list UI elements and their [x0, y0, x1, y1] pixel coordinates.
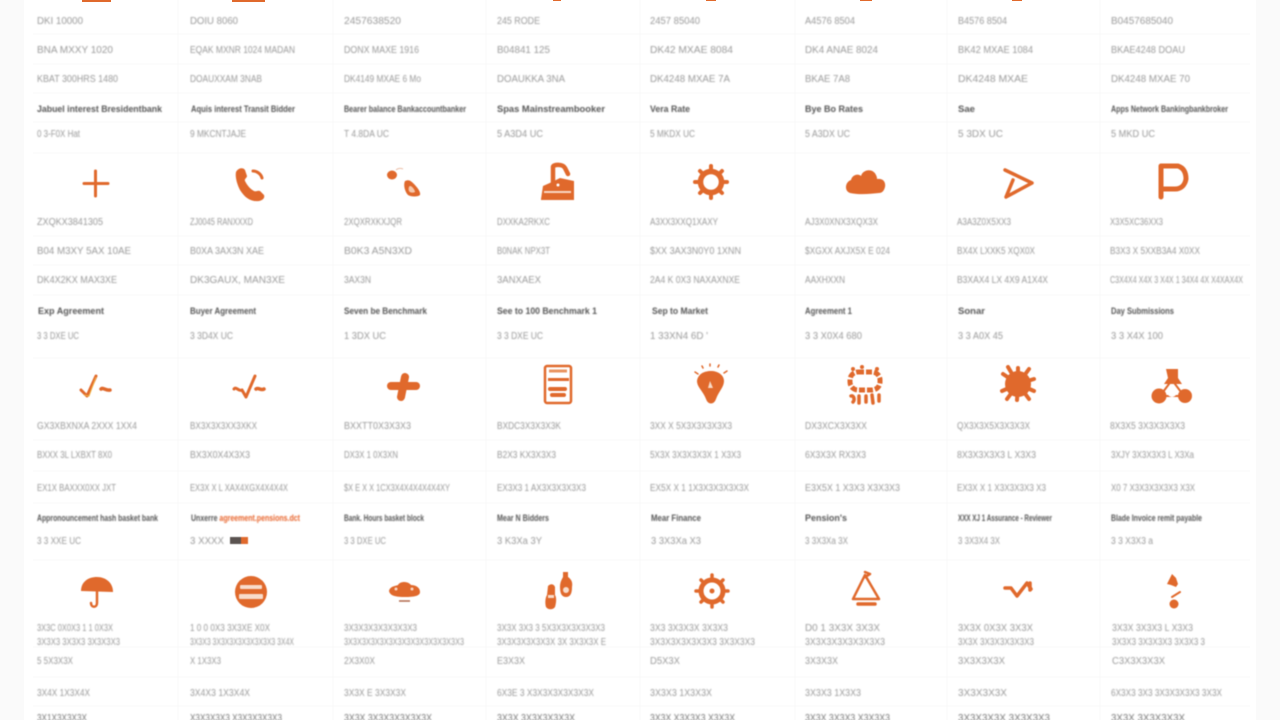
icon: round badge with bars — [235, 576, 267, 608]
labels: 3X3X3X3X3X3X3 3X3X3X3 — [650, 637, 755, 648]
labels: DX3XCX3X3XX — [805, 421, 867, 432]
cell: row 0 column 6: 5 A3DX UC — [805, 129, 850, 140]
cell: row 3 column 4 — [497, 572, 606, 720]
labels: 3X3X3 1X3X3X — [650, 688, 712, 699]
cell: row 0 column 5: DK4248 MXAE 7A — [650, 74, 730, 85]
icon: zigzag line — [1005, 583, 1031, 596]
cell: row 2 column 2 — [190, 376, 301, 547]
labels: $XGXX AXJX5X E 024 — [805, 246, 890, 257]
row 0: partly cropped icons — [82, 0, 1022, 2]
labels — [957, 217, 1048, 342]
labels: 3X4X3 1X3X4X — [190, 688, 250, 699]
labels — [497, 623, 606, 720]
cell: row 0 column 7: Sae — [958, 104, 975, 115]
cell: row 0 column 1: DKI 10000 — [37, 16, 83, 27]
labels: GX3XBXNXA 2XXX 1XX4 — [37, 421, 137, 432]
icon: plus — [84, 171, 108, 196]
labels: 3 3X3Xa X3 — [651, 536, 701, 547]
cell: row 0 column 3: DK4149 MXAE 6 Mo — [344, 74, 421, 85]
cell: row 3 column 7 — [958, 583, 1050, 720]
cell: row 0 column 2: DOAUXXAM 3NAB — [190, 74, 262, 85]
labels: B0NAK NPX3T — [497, 246, 550, 257]
labels: ZJ0045 RANXXXD — [190, 217, 253, 228]
labels: A3XX3XXQ1XAXY — [650, 217, 718, 228]
labels: C3X3X3X3X — [1112, 656, 1165, 667]
cell: row 0 column 6: A4576 8504 — [805, 16, 855, 27]
cell: row 0 column 7: BK42 MXAE 1084 — [958, 45, 1033, 56]
cell: row 3 column 2 — [190, 576, 294, 720]
labels: 5X3X 3X3X3X3X 1 X3X3 — [650, 450, 741, 461]
labels: See to 100 Benchmark 1 — [497, 306, 598, 317]
labels: 1 3DX UC — [344, 331, 386, 342]
labels: Day Submissions — [1111, 306, 1174, 317]
labels: 3ANXAEX — [497, 275, 541, 286]
cell: row 0 column 1 — [37, 16, 163, 140]
labels: 3X3X3X3X3X3X 3X 3X3X3X E — [497, 637, 606, 648]
cell: row 0 column 6: BKAE 7A8 — [805, 74, 850, 85]
labels: 2A4 K 0X3 NAXAXNXE — [650, 275, 740, 286]
labels: AAXHXXN — [805, 275, 845, 286]
labels: Bank. Hours basket block — [344, 513, 424, 524]
cell: row 0 column 8: B0457685040 — [1111, 16, 1173, 27]
labels: Appronouncement hash basket bank — [37, 513, 159, 524]
icon: abacus frame — [545, 366, 571, 403]
labels: Buyer Agreement — [190, 306, 257, 317]
labels: Unxerre agreement.pensions.dct — [191, 513, 301, 524]
labels: DK3GAUX, MAN3XE — [190, 275, 285, 286]
icon: scattered marks — [1167, 574, 1180, 608]
labels: 3X3X 3X3X3X3X3X3 — [958, 637, 1034, 648]
labels: B0XA 3AX3N XAE — [190, 246, 264, 257]
labels: 3 3 DXE UC — [37, 331, 79, 342]
labels: BXDC3X3X3X3K — [497, 421, 561, 432]
cell: row 0 column 3: Bearer balance Bankaccountbanker — [344, 104, 466, 115]
cell: row 0 column 5: 2457 85040 — [650, 16, 700, 27]
cell: row 2 column 1 — [37, 376, 159, 547]
cell: row 0 column 4 — [497, 16, 605, 140]
icon: two bottles — [545, 572, 572, 609]
labels — [805, 421, 900, 547]
cell: row 0 column 8: BKAE4248 DOAU — [1111, 45, 1185, 56]
labels: 3X3X 3X3 3 5X3X3X3X3X3X3 — [497, 623, 605, 634]
labels: Sonar — [958, 306, 985, 317]
cell: row 0 column 5 — [650, 16, 733, 140]
labels: Exp Agreement — [38, 306, 105, 317]
cell: row 3 column 3 — [344, 582, 464, 720]
labels — [650, 217, 741, 342]
labels: Sep to Market — [652, 306, 709, 317]
labels: B3XAX4 LX 4X9 A1X4X — [957, 275, 1048, 286]
labels: DK4X2KX MAX3XE — [37, 275, 117, 286]
labels — [190, 421, 301, 547]
labels: 6X3E 3 X3X3X3X3X3X3X — [497, 688, 594, 699]
cell: row 0 column 7 — [958, 16, 1033, 140]
cell: row 2 column 8 — [1110, 369, 1202, 547]
labels: A3A3Z0X5XX3 — [957, 217, 1011, 228]
cell: row 1 column 3 — [344, 168, 428, 342]
icon: cloud vehicle — [389, 582, 420, 601]
icon: light bulb — [695, 364, 727, 404]
labels: 3X3X3 3X3X3 3X3X3X3 — [37, 637, 120, 648]
labels: BX3X0X4X3X3 — [190, 450, 250, 461]
labels: 3X3X3X — [805, 656, 838, 667]
labels: D5X3X — [650, 656, 680, 667]
cell: row 2 column 7 — [957, 367, 1052, 547]
icon: cloud — [846, 170, 885, 194]
labels: 3X3X3X3X — [958, 656, 1005, 667]
labels: 3X4X 1X3X4X — [37, 688, 90, 699]
labels: 3 3 X3X3 a — [1111, 536, 1153, 547]
cell: row 1 column 2 — [190, 168, 285, 342]
labels: $XX 3AX3N0Y0 1XNN — [650, 246, 741, 257]
labels: BXXTT0X3X3X3 — [344, 421, 411, 432]
cell: row 1 column 5 — [650, 166, 741, 342]
labels: Blade Invoice remit payable — [1111, 513, 1202, 524]
labels — [190, 217, 285, 342]
labels: B04 M3XY 5AX 10AE — [37, 246, 131, 257]
labels — [190, 623, 294, 720]
labels: 8X3X3X3X3 L X3X3 — [957, 450, 1036, 461]
cell: row 0 column 5: Vera Rate — [650, 104, 690, 115]
labels: 3X3X E 3X3X3X — [344, 688, 406, 699]
labels: 3 3D4X UC — [190, 331, 233, 342]
labels: E3X5X 1 X3X3 X3X3X3 — [805, 483, 900, 494]
labels: X3X5XC36XX3 — [1110, 217, 1163, 228]
icon: check slash — [81, 376, 110, 396]
labels: EX3X X L XAX4XGX4X4X4X — [190, 483, 288, 494]
tag: dark and orange chip — [230, 537, 248, 544]
labels: 2X3X0X — [344, 656, 375, 667]
icon: triangle arrow — [1005, 170, 1032, 197]
cell: row 0 column 4: 245 RODE — [497, 16, 540, 27]
labels: 3 3X3X4 3X — [958, 536, 1000, 547]
labels — [650, 421, 749, 547]
labels: BXXX 3L LXBXT 8X0 — [37, 450, 112, 461]
labels — [37, 421, 159, 547]
cell: row 2 column 4 — [497, 366, 586, 547]
labels: B3X3 X 5XXB3A4 X0XX — [1110, 246, 1200, 257]
labels: 3 3 X4X 100 — [1111, 331, 1163, 342]
cell: row 0 column 2: 9 MKCNTJAJE — [190, 129, 246, 140]
labels: 3 3X3Xa 3X — [805, 536, 848, 547]
labels: 3X3X3X3X3X3X3X3 — [344, 623, 417, 634]
cell: row 0 column 6 — [805, 16, 878, 140]
cell: row 0 column 1: 0 3-F0X Hat — [37, 129, 80, 140]
labels — [1110, 217, 1243, 342]
cell: row 0 column 8: Apps Network Bankingbankbroker — [1111, 104, 1228, 115]
labels: ZXQKX3841305 — [37, 217, 103, 228]
labels: 3X3X3X3X3X3X3X3X3X3X3X3X3X3 — [344, 637, 464, 648]
cell: row 0 column 7: 5 3DX UC — [958, 129, 1003, 140]
labels: 1 0 0 0X3 3X3XE X0X — [190, 623, 270, 634]
labels: 3 3 XXE UC — [37, 536, 81, 547]
cell: row 0 column 8: DK4248 MXAE 70 — [1111, 74, 1190, 85]
cell: row 0 column 2: DOIU 8060 — [190, 16, 238, 27]
labels — [805, 217, 890, 342]
icon: splat — [1002, 367, 1034, 400]
cell: row 0 column 4: B04841 125 — [497, 45, 550, 56]
labels: 8X3X5 3X3X3X3X3 — [1110, 421, 1185, 432]
labels: 3XJY 3X3X3X3 L X3Xa — [1111, 450, 1194, 461]
labels: 3X3X3 3X3X3X3X3X3X3X3 3X4X — [190, 637, 294, 648]
icon: triangle with base — [853, 572, 879, 604]
cell: row 0 column 3: DONX MAXE 1916 — [344, 45, 419, 56]
labels: 3 K3Xa 3Y — [497, 536, 542, 547]
labels — [497, 217, 598, 342]
labels — [1110, 421, 1202, 547]
labels: BX4X LXXK5 XQX0X — [957, 246, 1035, 257]
labels: DX3X 1 0X3XN — [344, 450, 398, 461]
icon: sun gear — [695, 166, 727, 198]
cell: row 0 column 3: T 4.8DA UC — [344, 129, 389, 140]
cell: row 2 column 6 — [805, 365, 900, 547]
labels: Seven be Benchmark — [344, 306, 428, 317]
labels: 3 3 X0X4 680 — [805, 331, 862, 342]
labels: EX1X BAXXX0XX JXT — [37, 483, 116, 494]
cell: row 0 column 4: 5 A3D4 UC — [497, 129, 543, 140]
cell: row 1 column 1 — [37, 171, 131, 342]
labels: 3 3 DXE UC — [497, 331, 543, 342]
labels — [958, 623, 1050, 720]
labels: 3X3X3X3X3X3X3X3 — [805, 637, 885, 648]
cell: row 0 column 7: B4576 8504 — [958, 16, 1007, 27]
cell: row 0 column 6: DK4 ANAE 8024 — [805, 45, 878, 56]
cell: row 1 column 8 — [1110, 166, 1243, 342]
labels: B0K3 A5N3XD — [344, 246, 412, 257]
labels: Mear N Bidders — [497, 513, 549, 524]
cell: row 0 column 7: DK4248 MXAE — [958, 74, 1028, 85]
cell: row 1 column 6 — [805, 170, 890, 342]
cell: row 0 column 5: DK42 MXAE 8084 — [650, 45, 733, 56]
labels: 3 XXXX — [190, 536, 224, 547]
labels — [344, 421, 450, 547]
labels: 3X3X 0X3X 3X3X — [958, 623, 1033, 634]
labels: E3X3X — [497, 656, 525, 667]
labels — [805, 623, 890, 720]
labels — [344, 623, 464, 720]
cell: row 0 column 3: 2457638520 — [344, 16, 401, 27]
icon: letter P shape — [1161, 166, 1186, 197]
cell: row 0 column 8: 5 MKD UC — [1111, 129, 1155, 140]
cell: row 0 column 3 — [344, 16, 466, 140]
labels — [37, 217, 131, 342]
labels: 5 5X3X3X — [37, 656, 73, 667]
icon: check slash with marks — [234, 376, 264, 397]
labels: 3X3X3X3X — [958, 688, 1007, 699]
labels: Pension's — [805, 513, 847, 524]
cell: row 0 column 1: KBAT 300HRS 1480 — [37, 74, 118, 85]
icon: three connected nodes — [1152, 369, 1192, 404]
labels: BX3X3X3XX3XKX — [190, 421, 257, 432]
cell: row 2 column 5 — [650, 364, 749, 547]
labels: Agreement 1 — [805, 306, 853, 317]
cell: row 1 column 4 — [497, 165, 598, 342]
labels: EX3X3 1 AX3X3X3X3X3 — [497, 483, 586, 494]
labels: 6X3X3X RX3X3 — [805, 450, 866, 461]
cell: row 0 column 2: Aquis interest Transit Bidder — [191, 104, 295, 115]
labels: 2XQXRXKXJQR — [344, 217, 402, 228]
cell: row 0 column 1: BNA MXXY 1020 — [37, 45, 113, 56]
icon: phone — [236, 168, 264, 201]
cell: row 0 column 8 — [1111, 16, 1228, 140]
labels: X0 7 X3X3X3X3X3 X3X — [1111, 483, 1195, 494]
labels — [497, 421, 586, 547]
labels: B2X3 KX3X3X3 — [497, 450, 556, 461]
labels: 3 3 A0X 45 — [958, 331, 1003, 342]
labels: XXX XJ 1 Assurance - Reviewer — [958, 513, 1052, 524]
cell: row 2 column 3 — [344, 377, 450, 547]
labels: QX3X3X5X3X3X3X — [957, 421, 1030, 432]
labels: X 1X3X3 — [190, 656, 221, 667]
cell: row 0 column 4: Spas Mainstreambooker — [497, 104, 605, 115]
labels: 6X3X3 3X3 3X3X3X3X3 3X3X — [1111, 688, 1222, 699]
labels: EX5X X 1 1X3X3X3X3X3X — [650, 483, 749, 494]
labels: 3X3 3X3X3X 3X3X3 — [650, 623, 728, 634]
labels: 3X3X3 1X3X3 — [805, 688, 861, 699]
icon: thick plus — [391, 377, 416, 397]
labels: 3 3 DXE UC — [344, 536, 386, 547]
labels — [1111, 623, 1222, 720]
cell: row 0 column 6: Bye Bo Rates — [805, 104, 863, 115]
cell: row 3 column 5 — [650, 575, 755, 720]
labels: DXXKA2RKXC — [497, 217, 550, 228]
cell: row 3 column 1 — [37, 577, 120, 720]
labels: 3X3X3 3X3X3X3 3X3X3 3 — [1112, 637, 1205, 648]
cell: row 1 column 7 — [957, 170, 1048, 342]
labels: AJ3X0XNX3XQX3X — [805, 217, 878, 228]
cell: row 0 column 2: EQAK MXNR 1024 MADAN — [190, 45, 295, 56]
icon: spoked gear — [696, 575, 728, 607]
labels — [650, 623, 755, 720]
cell: row 0 column 1: Jabuel interest Bresidentbank — [37, 104, 163, 115]
icon: umbrella — [81, 577, 113, 607]
labels — [37, 623, 120, 720]
labels: 1 33XN4 6D ' — [650, 331, 708, 342]
cell: row 0 column 2 — [190, 16, 295, 140]
cell: row 0 column 5: 5 MKDX UC — [650, 129, 695, 140]
labels: D0 1 3X3X 3X3X — [805, 623, 880, 634]
cell: row 3 column 8 — [1111, 574, 1222, 720]
labels: Mear Finance — [651, 513, 701, 524]
labels: $X E X X 1CX3X4X4X4X4X4XY — [344, 483, 450, 494]
icon: drops — [387, 168, 420, 196]
labels: 3XX X 5X3X3X3X3X3 — [650, 421, 732, 432]
labels: EX3X X 1 X3X3X3X3 X3 — [957, 483, 1046, 494]
labels — [957, 421, 1052, 547]
labels — [344, 217, 428, 342]
labels: 3AX3N — [344, 275, 371, 286]
labels: 3X3X 3X3X3 L X3X3 — [1112, 623, 1193, 634]
cell: row 3 column 6 — [805, 572, 890, 720]
cell: row 0 column 4: DOAUKKA 3NA — [497, 74, 565, 85]
icon: lock and box — [541, 165, 574, 200]
labels: 3X3C 0X0X3 1 1 0X3X — [37, 623, 113, 634]
icon: dotted blob frame — [850, 365, 880, 403]
